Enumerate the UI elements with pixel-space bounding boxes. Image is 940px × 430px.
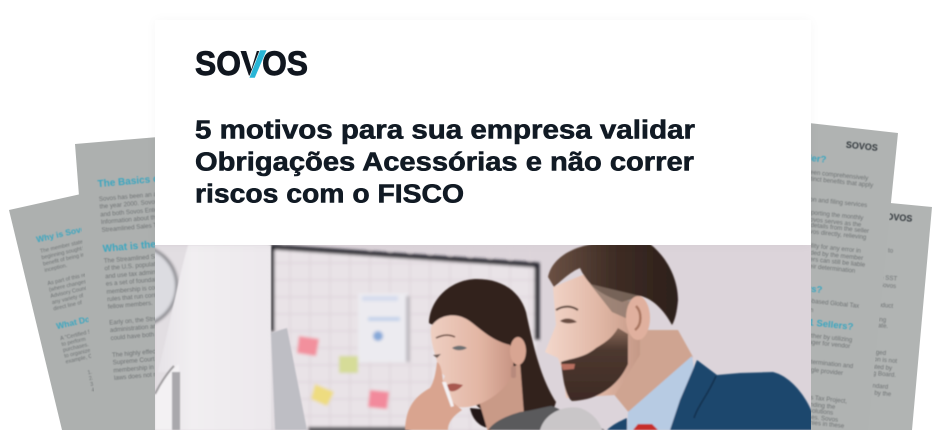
- sticky note: pink: [297, 336, 319, 356]
- sheet text: second from right: liability for any error in: [800, 242, 862, 255]
- pinned paper with chart: [358, 293, 408, 362]
- white title card: [155, 20, 811, 245]
- sheet text: second from left: and both Sovos Enterprise: [100, 205, 174, 218]
- pinboard: [273, 247, 537, 430]
- sheet text: second from right: Seller?: [794, 151, 827, 166]
- sheet text: second from right: anager for vendor: [801, 338, 851, 350]
- sheet text: second from right: SaaS-based Global Tax: [794, 296, 860, 310]
- man: shirt collar: [627, 356, 696, 430]
- sheet text: far right: to: [888, 248, 894, 255]
- sheet text: second from right: Model 1 Sellers?: [778, 314, 854, 333]
- sheet text: far right: state.: [873, 322, 889, 330]
- sheet text: second from right: rovided by the member: [800, 248, 863, 262]
- sheet text: second from left: Streamlined Sales Tax: [101, 221, 164, 234]
- sheet text: far left: to organize: [64, 348, 91, 360]
- sheet text: second from left: The Streamlined Sales: [104, 252, 167, 265]
- sheet text: second from left: the year 2000. Sovos is: [99, 198, 164, 211]
- document sheet: second from right: [767, 122, 898, 430]
- sheet text: far left: purchases.: [62, 342, 89, 354]
- document sheet: far right: [850, 202, 932, 430]
- sheet text: far right: product: [872, 301, 894, 310]
- sheet text: far right: Sovos: [879, 281, 896, 290]
- sheet text: second from left: Sovos has been an active: [99, 190, 170, 203]
- title: [195, 116, 695, 208]
- sheet text: second from left: Early on, the Stream: [109, 315, 166, 327]
- sheet text: far left: 1.: [87, 370, 93, 376]
- printed document held by the woman: [271, 328, 307, 430]
- white monitor: [158, 245, 271, 430]
- sheet text: far left: 3.: [90, 381, 96, 388]
- sheet text: second from right: lculation and filing services: [794, 194, 868, 209]
- sheet text: far left: What Do: [55, 314, 91, 331]
- woman: ear and earring: [510, 337, 526, 365]
- sheet text: second from right: [767, 134, 879, 430]
- sheet text: second from left: membership is comp: [106, 284, 164, 296]
- sheet text: second from right: r, Sovos serves as the: [800, 215, 862, 229]
- woman: top: [488, 406, 605, 430]
- sheet text: far left: As part of this re: [47, 272, 87, 287]
- sheet text: far right: ndard: [872, 383, 889, 391]
- sheet text: far right: tated by: [870, 363, 893, 372]
- woman: neck: [478, 362, 524, 430]
- woman: face: [431, 315, 513, 407]
- sheet text: second from left: Supreme Court in: [112, 355, 162, 367]
- sheet text: far left: Advisory Council: [50, 285, 90, 300]
- wall clock: [155, 247, 180, 325]
- sheet text: far right: the SST: [875, 274, 898, 283]
- sheet text: far right: by the: [874, 389, 892, 398]
- sheet text: far right: SOVOS: [880, 211, 913, 224]
- sheet text: second from right: further by utilizing: [804, 332, 853, 344]
- logo: Sovos: SOVOS: [195, 45, 308, 83]
- sheet text: second from right: solutions: [808, 407, 834, 417]
- woman: hand on cheek: [405, 362, 462, 430]
- man: jacket: [607, 360, 812, 430]
- sheet text: second from right: SOVOS: [845, 140, 878, 153]
- sheet text: far right: [865, 211, 913, 398]
- sheet text: second from left: [97, 173, 188, 382]
- sheet text: far left: (where changes: [48, 279, 87, 293]
- sheet text: second from right: single provider: [803, 366, 843, 377]
- sheet text: second from left: The Basics of: [97, 173, 164, 190]
- sticky note: green: [339, 356, 358, 373]
- sheet text: far left: inception.: [44, 263, 68, 274]
- sheet text: far left: [35, 222, 127, 398]
- woman: [405, 279, 605, 430]
- sheet text: far left: 4.: [91, 387, 97, 394]
- sheet text: second from right: has been comprehensively: [795, 168, 869, 182]
- man: beard: [561, 328, 628, 401]
- sheet text: second from left: membership in the: [113, 363, 165, 374]
- sheet text: second from left: of the U.S. population: [104, 260, 165, 273]
- sheet text: second from right: supporting the monthly: [801, 208, 865, 222]
- monitor stand: [155, 364, 180, 430]
- sheet text: second from left: Information about the: [101, 214, 160, 226]
- sheet text: second from right: anding the: [806, 401, 836, 411]
- sticky note: pink lower: [368, 390, 389, 409]
- sheet text: second from right: Sellers?: [785, 281, 823, 296]
- sheet text: far left: example, C: [65, 354, 93, 366]
- title: Obrigações Acessórias e não correr: [195, 148, 694, 176]
- document sheet: far left: [9, 192, 160, 430]
- sheet text: second from right: their determination: [804, 263, 856, 275]
- sheet text: far left: 2.: [88, 375, 94, 382]
- sheet text: second from right: Sellers can still be liable: [799, 255, 866, 269]
- sheet text: second from left: The highly effective: [112, 347, 166, 359]
- sheet text: far left: to perform: [61, 337, 87, 348]
- sheet text: second from left: administration and: [110, 323, 161, 334]
- sheet text: far right: ing Board.: [868, 370, 897, 379]
- sheet text: far left: benefit of being in: [43, 252, 85, 268]
- sheet text: far left: direct line of: [53, 300, 83, 312]
- sheet text: second from left: rules that run contra: [107, 291, 163, 303]
- man: red tie: [633, 424, 658, 430]
- sheet text: second from left: laws does not req: [114, 371, 163, 382]
- sheet text: far left: Why is Sovos: [35, 222, 92, 244]
- sticky note: yellow: [311, 384, 334, 406]
- sheet text: second from left: es a set of foundation: [106, 276, 166, 288]
- man: hair: [548, 243, 678, 325]
- sheet text: second from right: ases. Sovos: [804, 414, 838, 424]
- office background: clock and pinboard: [155, 245, 542, 430]
- man: neck: [612, 330, 693, 414]
- sheet text: far left: A "Certified S: [60, 329, 93, 342]
- sheet text: second from right: determination and: [804, 358, 854, 370]
- sheet text: far right: ing: [878, 316, 887, 324]
- sheet text: second from right: distinct benefits that apply: [802, 175, 874, 189]
- sheet text: far left: The member states: [40, 239, 86, 255]
- sheet text: far left: beginning sought to: [41, 245, 88, 261]
- photo: two colleagues looking at a monitor: [97, 243, 812, 430]
- sheet text: far right: tion is not: [870, 356, 898, 365]
- man: face: [545, 272, 640, 398]
- sheet text: far left: any variety of: [51, 293, 84, 306]
- sheet text: second from left: What is the: [102, 239, 157, 255]
- woman: hair strand under chin: [470, 408, 490, 428]
- man: [545, 243, 812, 430]
- sheet text: second from left: and use tax administ: [105, 268, 162, 280]
- title: riscos com o FISCO: [195, 180, 464, 208]
- woman: hair: [429, 279, 556, 425]
- man: ear: [626, 296, 650, 340]
- sheet text: second from right: Sales Tax Project,: [798, 393, 848, 405]
- sheet text: second from right: mer details from the seller: [798, 221, 869, 235]
- sheet text: second from left: could have both th: [110, 331, 162, 342]
- sheet text: second from right: on: [806, 306, 814, 314]
- document sheet: second from left: [75, 136, 188, 430]
- sheet text: second from left: fellow members.: [108, 300, 153, 311]
- sheet text: second from right: Sovos directly, relieving: [802, 228, 867, 241]
- sheet text: far right: naged: [869, 348, 887, 357]
- title: 5 motivos para sua empresa validar: [195, 116, 695, 144]
- man: eye: [560, 318, 577, 323]
- sheet text: second from right: panies in these: [802, 419, 845, 430]
